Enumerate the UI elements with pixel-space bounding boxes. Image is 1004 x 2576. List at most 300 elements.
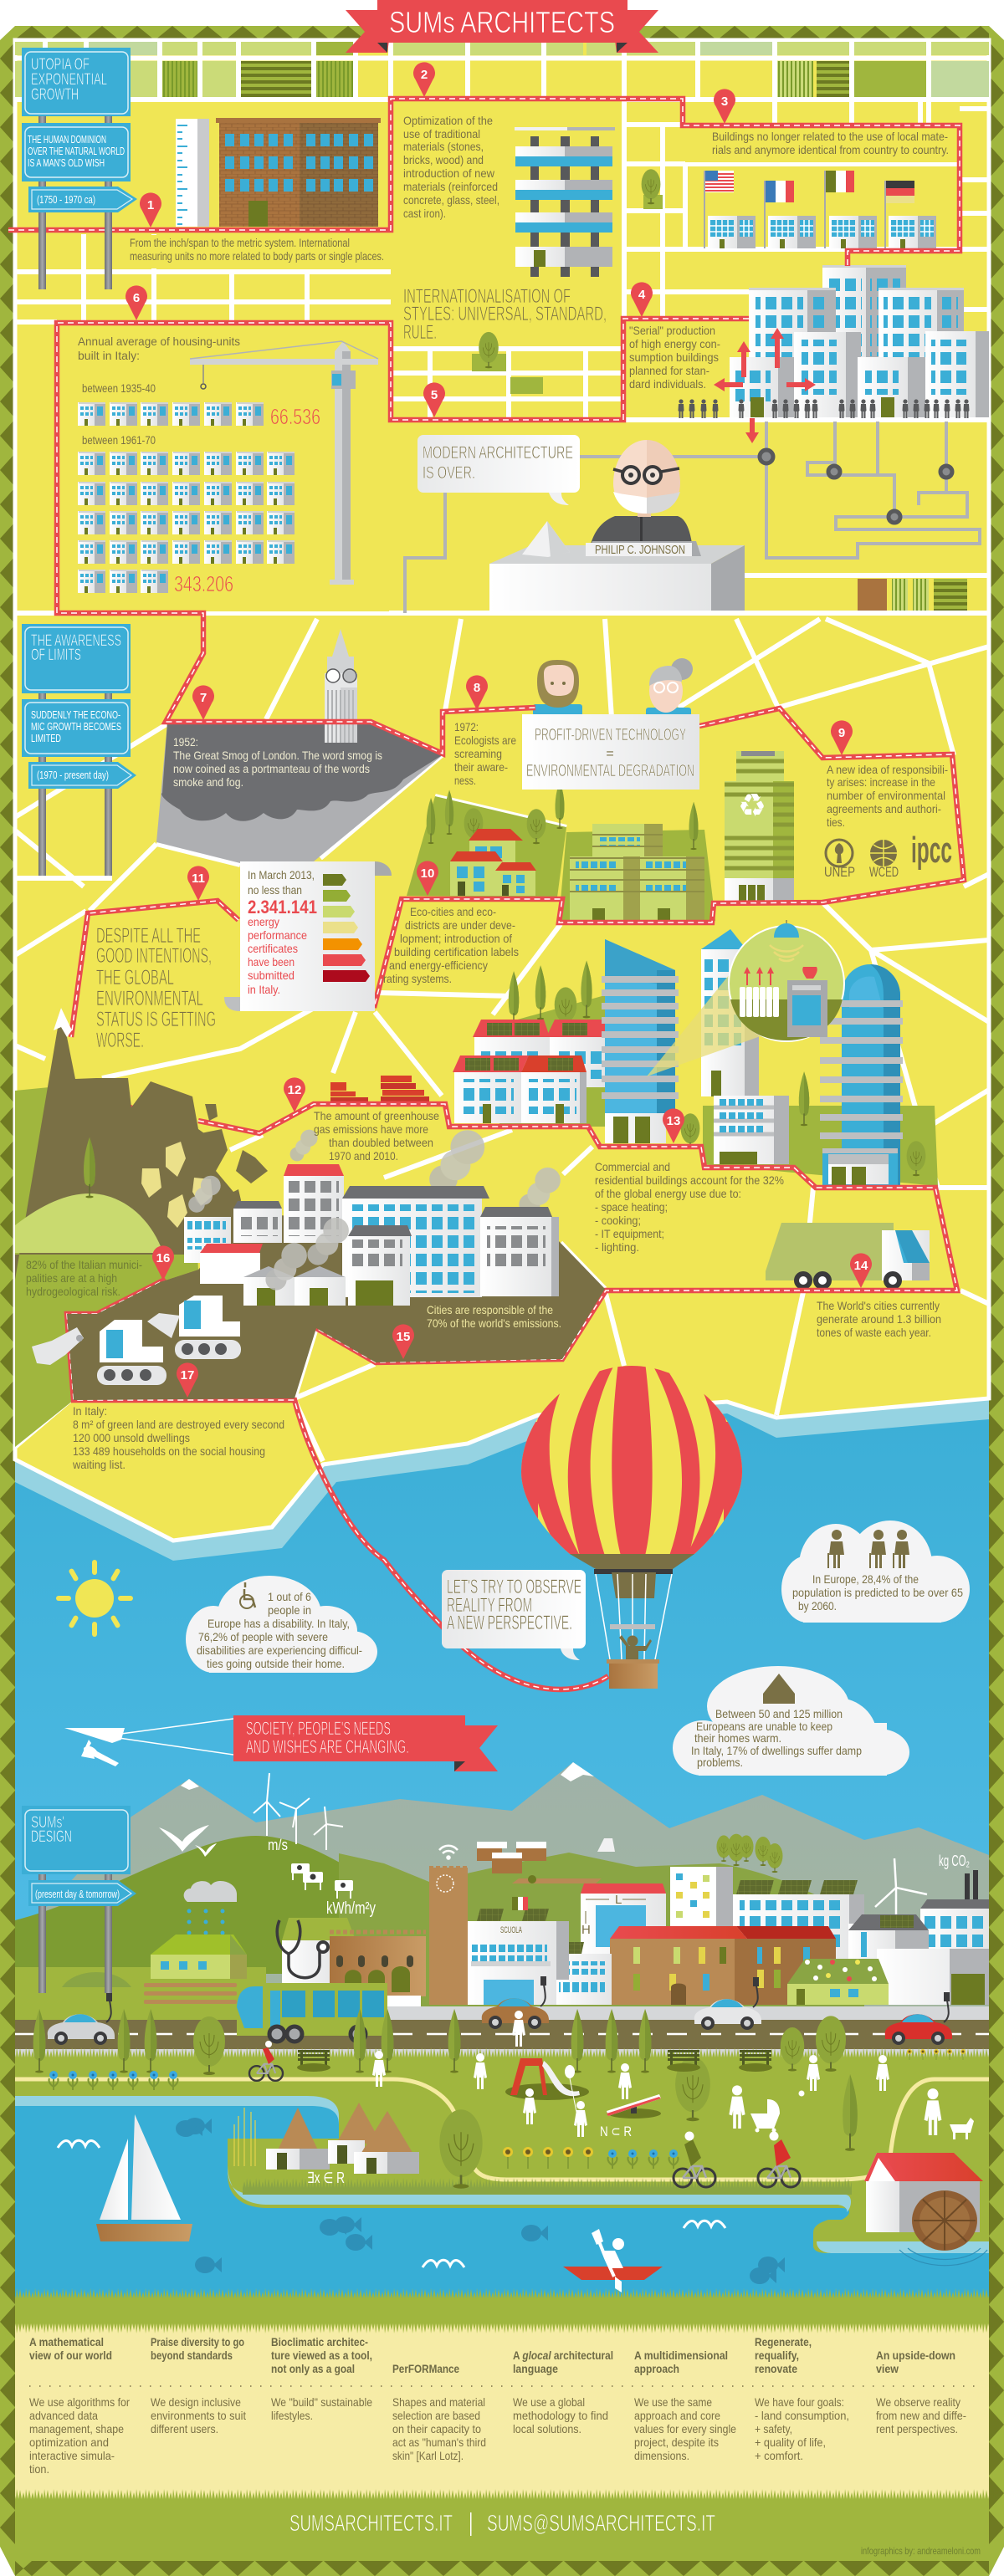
text 3: rials and anymore identical from country to country. [712, 143, 949, 156]
playground and people [372, 2011, 974, 2139]
internationalisation heading [403, 285, 607, 344]
cyclists [249, 2041, 800, 2187]
pin 11: 11 [192, 871, 205, 886]
speech bubble: modern architecture is over: MODERN ARCHITECTURE [423, 443, 573, 463]
text 12: gas emissions have more [314, 1122, 428, 1136]
text 9: agreements and authori- [827, 802, 941, 815]
column 1: interactive simula- [29, 2449, 115, 2462]
coast shadow [15, 1388, 989, 1561]
text 16: 82% of the Italian munici- [26, 1258, 142, 1271]
car white [694, 1977, 761, 2030]
cows [291, 1863, 353, 1899]
paper cone [522, 521, 570, 557]
pin 14 [850, 1253, 872, 1288]
hospital [282, 1918, 356, 1983]
text 10: districts are under deve- [405, 918, 515, 932]
pin 9 [831, 720, 853, 755]
column 6: approach [634, 2362, 679, 2375]
child with balloon [565, 2065, 587, 2137]
footer contacts: SUMS@SUMSARCHITECTS.IT [487, 2510, 715, 2536]
digger left [32, 1320, 166, 1385]
flag: Italy [826, 171, 854, 192]
pin 15: 15 [397, 1330, 410, 1344]
stove [787, 967, 827, 1037]
cloud: damp dwellings: problems. [697, 1756, 743, 1769]
cloud: damp dwellings: their homes warm. [694, 1731, 781, 1745]
green-roof house and crops [144, 1935, 247, 2004]
green land patches [15, 796, 938, 1447]
valves [760, 450, 952, 523]
sidewalks and road [15, 1996, 989, 2060]
text 16: palities are at a high [26, 1271, 117, 1285]
text 4: planned for stan- [629, 364, 709, 377]
eco house back [469, 829, 523, 866]
column 7: + comfort. [755, 2449, 803, 2462]
icon: tree section 5 [479, 332, 499, 368]
speech bubble: new perspective: LET'S TRY TO OBSERVE [447, 1576, 581, 1598]
flag: France [766, 181, 794, 202]
speech bubble: new perspective: A NEW PERSPECTIVE. [447, 1612, 572, 1634]
text 17: 120 000 unsold dwellings [73, 1431, 190, 1444]
sign: profit-driven technology: = [606, 747, 614, 761]
flag: USA [705, 171, 734, 192]
text 6: between 1961-70 [82, 433, 156, 447]
L by H building: H [581, 1923, 591, 1937]
text 13: - IT equipment; [595, 1227, 664, 1240]
column 3: ture viewed as a tool, [271, 2349, 372, 2362]
column 8: An upside-down [876, 2349, 955, 2362]
white long block [733, 1880, 864, 1959]
column 7: We have four goals: [755, 2395, 844, 2409]
energy class arrows [323, 874, 370, 982]
title ribbon [346, 0, 658, 53]
text 12: The amount of greenhouse [314, 1109, 439, 1122]
text 6: between 1935-40 [82, 381, 156, 395]
column 2: Praise diversity to go [151, 2335, 244, 2349]
label: kWh/m²y: kWh/m²y [326, 1899, 376, 1918]
house with solar roof [848, 1914, 929, 1974]
sign: dates [28, 1880, 136, 1906]
lake and river [15, 2096, 989, 2298]
text 17: 133 489 households on the social housing [73, 1444, 265, 1458]
fish [176, 2118, 785, 2284]
text 10: and energy-efficiency [389, 958, 488, 972]
electric cars [48, 1976, 952, 2045]
back slim tower [701, 929, 759, 1096]
city with blue towers [453, 920, 925, 1188]
text 14 [817, 1299, 941, 1339]
heading: despite all: STATUS IS GETTING [96, 1008, 216, 1031]
pin 2 [413, 62, 435, 97]
label: N subset of R: N ⊂ R [600, 2124, 632, 2139]
text 2: materials (reinforced [403, 180, 498, 193]
icon: tree section 3 [642, 169, 660, 204]
cloud: disability: people in [268, 1603, 311, 1617]
text 3 [712, 130, 949, 156]
column 8: from new and diffe- [876, 2409, 966, 2422]
icon: wifi [439, 1846, 458, 1858]
flags with national buildings [704, 171, 936, 248]
column 6: A multidimensional [634, 2349, 728, 2362]
yellow land [15, 40, 989, 1541]
text 14: The World's cities currently [817, 1299, 940, 1312]
crops [144, 1983, 237, 2004]
text 13: - cooking; [595, 1214, 641, 1227]
scroll text: no less than [248, 883, 302, 897]
text 10: building certification labels [394, 945, 519, 958]
school: SCUOLA [500, 1925, 522, 1935]
balloon [521, 1355, 744, 1689]
column 5 [513, 2349, 613, 2435]
heading: despite all: ENVIRONMENTAL [96, 987, 203, 1010]
pin 10: 10 [421, 866, 434, 881]
pin 9: 9 [838, 726, 845, 740]
water mill [864, 2153, 987, 2266]
factories with smoke [184, 1130, 561, 1306]
text 7 [173, 735, 382, 789]
front block [348, 1225, 412, 1306]
icon: stethoscope [277, 1920, 320, 1978]
pin 17 [177, 1362, 198, 1398]
scroll text: in Italy. [248, 983, 280, 996]
houses rear [473, 1020, 605, 1087]
internationalisation heading: RULE. [403, 321, 437, 344]
numbered pins [126, 62, 872, 1398]
round blue tower [820, 964, 903, 1188]
column 3: not only as a goal [271, 2362, 355, 2375]
factory with chimneys [920, 1870, 989, 1959]
logo: WCED: WCED [869, 864, 899, 880]
text 4: dard individuals. [629, 377, 706, 391]
pin 12 [284, 1077, 305, 1112]
speech bubble: modern architecture is over [417, 435, 580, 505]
column 2: environments to suit [151, 2409, 246, 2422]
pin 10 [417, 861, 438, 896]
text 13: - space heating; [595, 1200, 668, 1214]
text 2: materials (stones, [403, 140, 484, 153]
white road network [15, 40, 989, 1461]
pin 5 [423, 382, 445, 417]
label: exists x in R: ∃x ∈ R [307, 2170, 345, 2186]
sign: profit-driven technology: ENVIRONMENTAL DEGRADATION [526, 762, 694, 780]
sign: dates: (1750 - 1970 ca) [37, 193, 95, 206]
school [468, 1897, 569, 2005]
text 9: ties. [827, 815, 845, 829]
scroll text: have been [248, 955, 295, 969]
sign: heading [22, 624, 131, 693]
text 6 [78, 335, 240, 447]
sign: heading: OF LIMITS [31, 647, 81, 664]
sign: dominion: THE HUMAN DOMINION [28, 133, 106, 146]
medieval palace [330, 1932, 426, 1996]
pin 12: 12 [288, 1083, 301, 1097]
text 8: ness. [454, 774, 476, 787]
sign: dates [28, 762, 136, 789]
text 2: bricks, wood) and [403, 153, 484, 166]
car brown [482, 1976, 549, 2029]
column 7: Regenerate, [755, 2335, 812, 2349]
radiator [740, 987, 779, 1017]
text 4: sumption buildings [629, 350, 719, 364]
text 2: use of traditional [403, 127, 480, 141]
text 16: hydrogeological risk. [26, 1285, 120, 1298]
Big Ben tower [325, 629, 357, 743]
logos: UNEP, WCED, IPCC [824, 830, 952, 880]
light cone [647, 966, 841, 1076]
scroll text: performance [248, 928, 307, 942]
text 15: 70% of the world's emissions. [427, 1316, 561, 1330]
cloud: damp dwellings [673, 1666, 909, 1776]
column 4: on their capacity to [392, 2422, 481, 2435]
label: m/s: m/s [268, 1837, 288, 1853]
text 8: their aware- [454, 760, 508, 774]
cloud: disability: 76,2% of people with severe [198, 1630, 328, 1643]
low white block [554, 1942, 612, 2005]
column 7: - land consumption, [755, 2409, 849, 2422]
pin 1: 1 [147, 198, 154, 212]
scroll text: certificates [248, 942, 298, 955]
park trees [33, 2009, 858, 2189]
text 9: A new idea of responsibili- [827, 763, 948, 776]
column 3: We "build" sustainable [271, 2395, 372, 2409]
icon: elderly people [828, 1530, 909, 1568]
sign: heading: UTOPIA OF [31, 56, 90, 74]
name plate: PHILIP C. JOHNSON [595, 543, 685, 557]
flower-roof house [787, 1959, 889, 2005]
column 7 [755, 2335, 849, 2462]
speech bubble: modern architecture is over: IS OVER. [423, 463, 475, 483]
banner [233, 1715, 498, 1771]
green park and path [15, 2047, 989, 2302]
bearded man [533, 660, 582, 716]
sign: dates: (present day & tomorrow) [35, 1888, 120, 1900]
tower crane [190, 341, 378, 585]
hang glider with banner [64, 1715, 498, 1771]
car grey [48, 1992, 115, 2045]
text 9: ty arises: increase in the [827, 775, 935, 789]
text 17: waiting list. [72, 1458, 126, 1471]
brick building and ruler [176, 118, 381, 227]
L by H building [581, 1883, 666, 1986]
text 17: 8 m² of green land are destroyed every second [73, 1418, 284, 1431]
column 6: project, despite its [634, 2435, 719, 2449]
text 2 [403, 114, 499, 220]
sign: dates [28, 187, 137, 212]
banner: AND WISHES ARE CHANGING. [246, 1736, 409, 1757]
flowers [49, 2049, 966, 2169]
pin 6: 6 [133, 291, 140, 305]
speech bubble: new perspective: REALITY FROM [447, 1594, 532, 1617]
text 16 [26, 1258, 142, 1298]
text 10 [383, 905, 519, 985]
eco district [427, 781, 704, 921]
sign: heading [22, 1806, 131, 1874]
logo: UNEP: UNEP [824, 864, 855, 880]
icon: recycle: ♻ [738, 787, 766, 824]
sign: heading: GROWTH [31, 86, 79, 104]
speech bubble: new perspective [442, 1570, 586, 1660]
column 1: optimization and [29, 2435, 109, 2449]
Philip Johnson at desk [417, 435, 745, 611]
pin 16 [152, 1245, 174, 1280]
road signs: awareness [22, 624, 136, 876]
column 8: We observe reality [876, 2395, 960, 2409]
rocks [141, 1142, 213, 1228]
column 8: view [876, 2362, 899, 2375]
footer contacts [289, 2510, 715, 2536]
text 15 [427, 1303, 561, 1330]
column 6: approach and core [634, 2409, 720, 2422]
scroll text: In March 2013, [248, 868, 315, 882]
sign: heading: DESIGN [31, 1828, 72, 1846]
pin 13: 13 [667, 1114, 680, 1128]
heading: despite all: DESPITE ALL THE [96, 924, 201, 948]
internationalisation heading: STYLES: UNIVERSAL, STANDARD, [403, 303, 607, 325]
digger right [147, 1296, 241, 1359]
small block [184, 1217, 231, 1263]
red-roof shed [200, 1244, 263, 1284]
text 2: concrete, glass, steel, [403, 193, 499, 207]
rain cloud [184, 1881, 237, 1935]
column 1: tion. [29, 2462, 49, 2476]
dog [950, 2118, 974, 2139]
text 17: In Italy: [73, 1404, 107, 1418]
text 13: residential buildings account for the 32% [595, 1173, 784, 1187]
text 12: than doubled between [329, 1136, 433, 1149]
number 343.206: 343.206 [174, 571, 233, 596]
eco house left [450, 851, 503, 896]
scroll with energy ratings [224, 861, 392, 1011]
town buildings [277, 1846, 989, 2005]
text 12: 1970 and 2010. [329, 1149, 398, 1163]
column 4 [392, 2362, 486, 2462]
bus [237, 1983, 387, 2042]
column 4: skin" [Karl Lotz]. [392, 2449, 464, 2462]
farm fields top row [15, 42, 989, 611]
pin 11 [187, 866, 209, 901]
icon: wheelchair [240, 1582, 255, 1608]
cloud: ageing population: population is predicted to be over 65 [792, 1586, 963, 1599]
label: kg CO2: kg CO₂ [939, 1853, 970, 1869]
pin 7 [192, 685, 214, 720]
ecologists [533, 658, 693, 718]
icon: house [763, 1674, 795, 1704]
column 2 [151, 2335, 246, 2435]
scroll text [248, 868, 317, 996]
text 10: rating systems. [383, 972, 452, 985]
wind turbines [254, 1773, 927, 1914]
lower meadow [15, 2288, 989, 2325]
column 2: different users. [151, 2422, 218, 2435]
sign: dominion: IS A MAN'S OLD WISH [28, 156, 105, 169]
sign: profit-driven technology [522, 714, 699, 790]
ground under factories [67, 1213, 605, 1400]
text 14: tones of waste each year. [817, 1326, 931, 1339]
logo: WCED [869, 840, 899, 880]
sign: economic growth: SUDDENLY THE ECONO- [31, 708, 120, 721]
diggers [32, 1296, 241, 1385]
text 9 [827, 763, 948, 829]
text 13: Commercial and [595, 1160, 670, 1173]
cloud: ageing population: by 2060. [798, 1599, 837, 1613]
column 2: beyond standards [151, 2349, 233, 2362]
cloud: damp dwellings: In Italy, 17% of dwellings suffer damp [691, 1744, 862, 1757]
column 5: A glocal architectural [513, 2349, 613, 2362]
passenger [619, 1635, 652, 1661]
houses front [453, 1055, 587, 1123]
hang glider [64, 1728, 125, 1766]
truck [766, 1223, 930, 1287]
pin 5: 5 [431, 388, 438, 402]
old woman [646, 658, 693, 718]
pipes [405, 422, 980, 613]
concrete building frame [515, 127, 615, 277]
factory lower [877, 1949, 989, 2005]
sign: dominion [22, 123, 131, 181]
cloud: disability: ties going outside their home. [207, 1657, 345, 1670]
text 10: lopment; introduction of [400, 932, 512, 945]
column 1: advanced data [29, 2409, 98, 2422]
column 4: act as "human's third [392, 2435, 486, 2449]
cloud: damp dwellings: Between 50 and 125 million [715, 1707, 843, 1720]
yellow-window building [670, 1867, 733, 1934]
text 15: Cities are responsible of the [427, 1303, 553, 1316]
sign: heading: SUMs' [31, 1814, 64, 1832]
text 4: of high energy con- [629, 337, 720, 350]
column 2: We design inclusive [151, 2395, 241, 2409]
text 8: Ecologists are [454, 733, 516, 747]
column 4: selection are based [392, 2409, 480, 2422]
column 8 [876, 2349, 966, 2435]
column 1: management, shape [29, 2422, 124, 2435]
text 7: The Great Smog of London. The word smog is [173, 749, 382, 762]
red route [8, 99, 964, 1689]
text 4 [629, 324, 720, 391]
brown red-roof block [610, 1926, 836, 2005]
text 1: From the inch/span to the metric system. International [130, 236, 350, 249]
teeter [607, 2094, 661, 2119]
eco tower [725, 751, 794, 901]
column 5: local solutions. [513, 2422, 581, 2435]
small factory [233, 1201, 282, 1243]
scroll text: 2.341.141 [248, 897, 317, 917]
birds [159, 1825, 217, 1857]
section text blocks on the map [26, 114, 949, 1471]
people row [678, 399, 969, 418]
title ribbon: SUMs ARCHITECTS [389, 5, 615, 39]
text 6: built in Italy: [78, 349, 140, 362]
text 13: of the global energy use due to: [595, 1187, 741, 1200]
sea [15, 1388, 989, 2300]
road cover behind text blocks [59, 101, 957, 611]
pin 17: 17 [181, 1368, 194, 1383]
pin 16: 16 [156, 1251, 170, 1265]
text 4: "Serial" production [629, 324, 715, 337]
values panel [15, 2323, 989, 2561]
cloud: disability: Europe has a disability. In Italy, [207, 1617, 350, 1630]
sign: profit-driven technology: PROFIT-DRIVEN TECHNOLOGY [535, 726, 686, 744]
column 1: view of our world [29, 2349, 112, 2362]
text 14: generate around 1.3 billion [817, 1312, 941, 1326]
kayak [563, 2229, 663, 2292]
sign: economic growth: LIMITED [31, 732, 61, 744]
pin 1 [140, 192, 161, 227]
zoom circle: domestic energy [729, 920, 844, 1041]
sheds [243, 1266, 346, 1306]
slide [505, 2058, 589, 2100]
standard towers [678, 265, 989, 443]
desk [489, 545, 745, 611]
